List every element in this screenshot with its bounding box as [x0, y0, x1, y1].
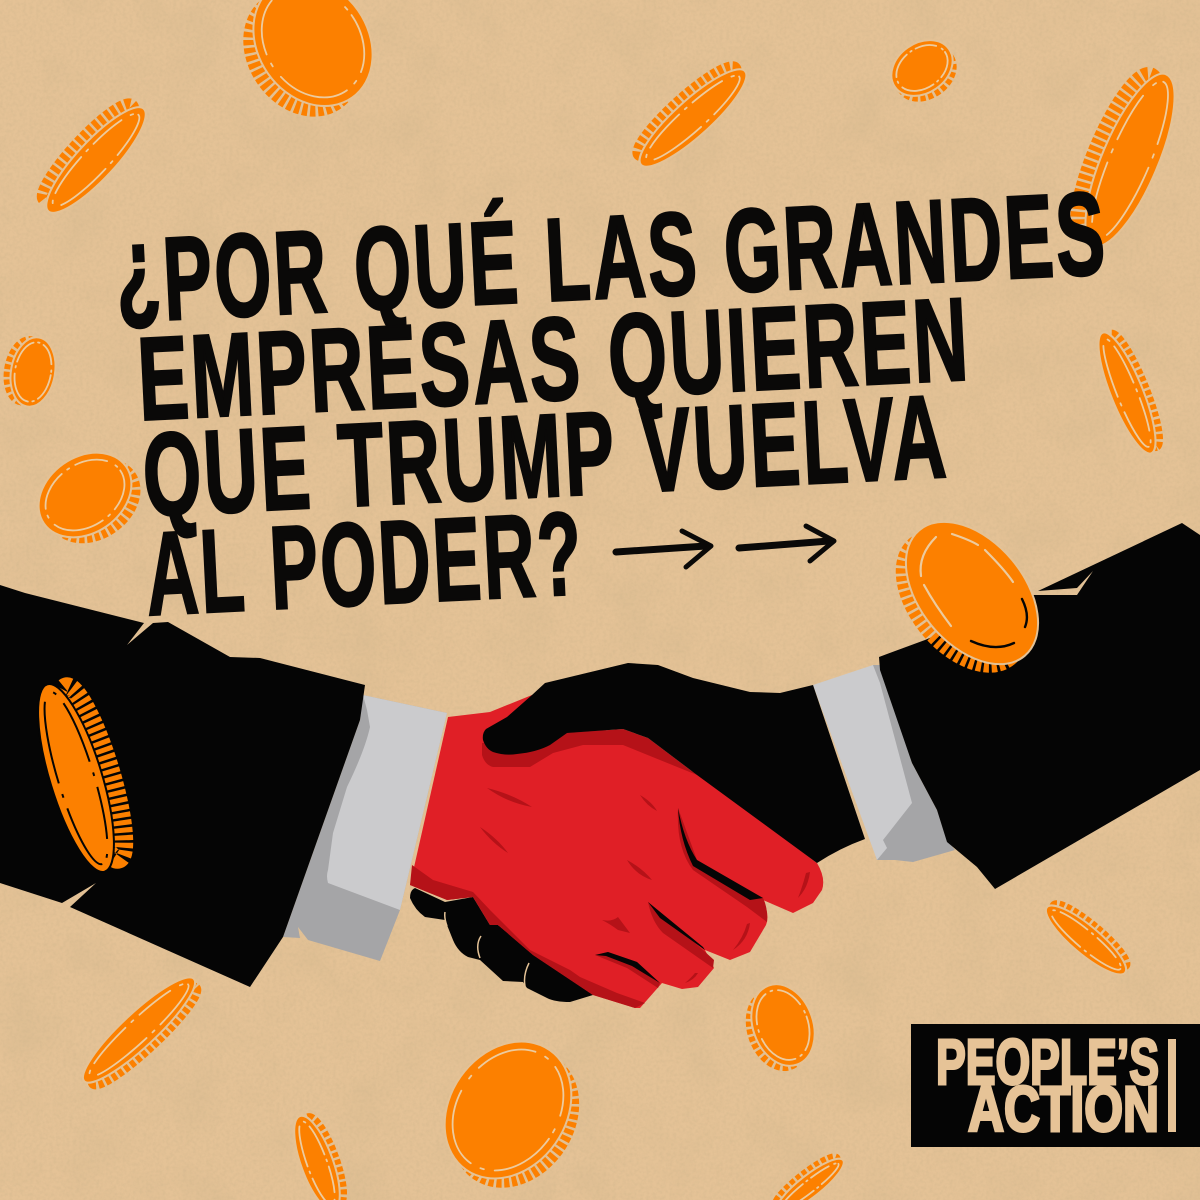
arrow 1 — [616, 531, 711, 567]
falling coins behind the title — [3, 0, 1192, 558]
coin: bottom right — [769, 1150, 850, 1200]
right sleeve — [879, 523, 1200, 889]
coin: right middle — [1088, 326, 1169, 459]
red hand — [410, 695, 823, 1008]
knuckle and nail marks — [480, 788, 810, 983]
arrow 2 — [739, 526, 834, 561]
left cuff — [283, 695, 447, 961]
coin: top left — [31, 92, 158, 224]
coin: bottom centre — [419, 1017, 601, 1200]
title — [112, 155, 1110, 641]
logo bar — [1168, 1039, 1176, 1132]
lower black fingers — [410, 888, 593, 1002]
coin: lower left — [73, 966, 207, 1096]
coin: left edge — [3, 333, 61, 410]
finger crease shadows — [678, 808, 767, 922]
coin: top centre — [626, 55, 757, 178]
coin: bottom left — [285, 1110, 351, 1200]
handshake illustration — [0, 523, 1200, 1008]
coin: left middle — [22, 435, 150, 558]
coin: top centre-left — [224, 0, 397, 133]
title line 4: AL PODER? — [143, 488, 587, 641]
logo: People's Action — [911, 1024, 1200, 1147]
black finger creases — [595, 808, 763, 983]
red hand lower shadow — [410, 865, 645, 1008]
coin: top right small — [881, 29, 965, 109]
coin: top right tall — [1061, 61, 1192, 257]
coin: below the hands — [738, 975, 826, 1076]
black hand and arm — [483, 663, 865, 863]
coins in front of the sleeves and below the hands — [22, 497, 1135, 1200]
coin: on left sleeve — [22, 674, 138, 879]
finger gaps on black hand — [445, 912, 529, 986]
coin: lower right — [1038, 895, 1135, 984]
left sleeve — [0, 585, 365, 987]
coin: on right sleeve — [875, 497, 1065, 693]
shadow under thumb — [482, 729, 697, 775]
right cuff — [813, 665, 955, 862]
title line 1: ¿ — [112, 201, 166, 335]
